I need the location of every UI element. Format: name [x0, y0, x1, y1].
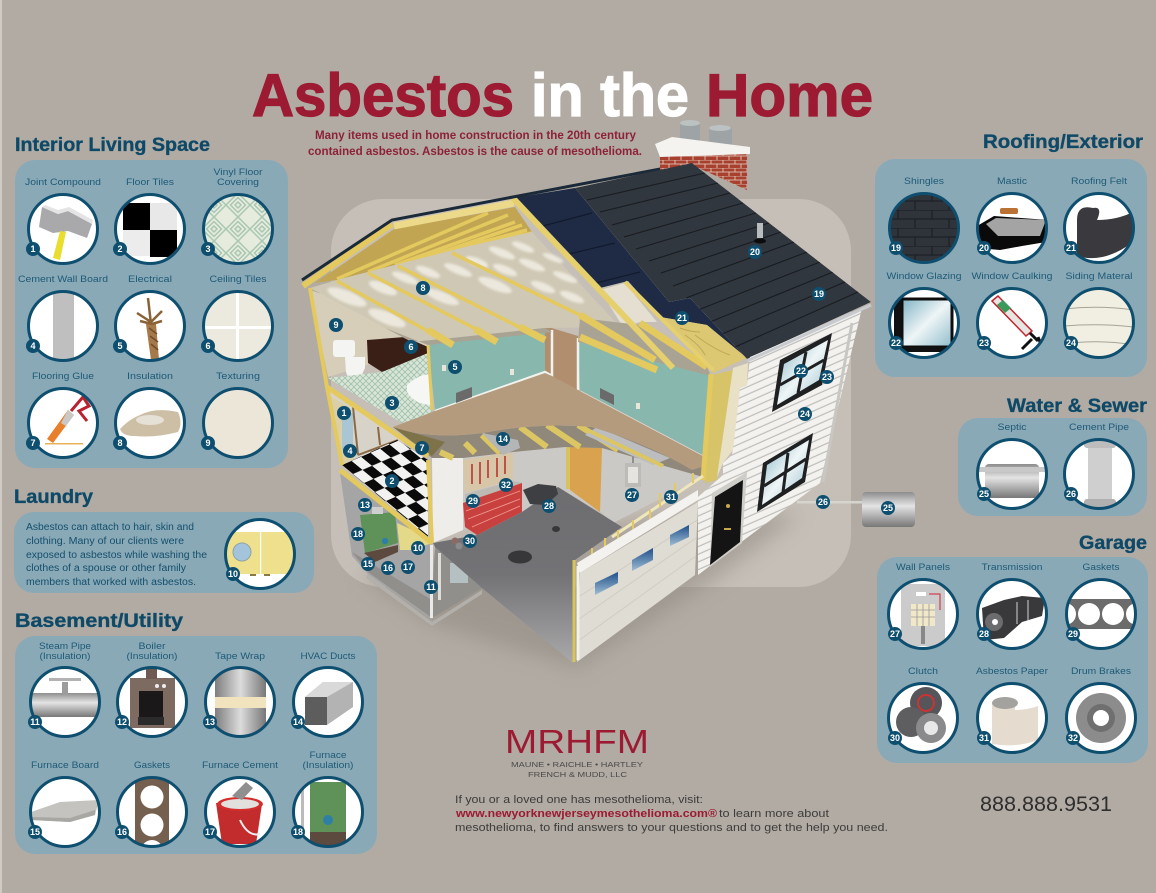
item: Shingles	[889, 176, 959, 263]
house number markers: 10	[413, 543, 423, 553]
house number markers: 13	[360, 500, 370, 510]
text: laundry description: exposed to asbestos while washing the	[26, 550, 208, 561]
text: laundry description	[26, 522, 208, 588]
item: Vinyl Floor Covering	[201, 167, 273, 264]
item: Cement Wall Board: 4	[30, 341, 36, 351]
attic insulation right of rafter	[600, 283, 657, 327]
garage front top trim	[577, 490, 698, 573]
item: Transmission: Transmission	[982, 562, 1042, 573]
item: Ceiling Tiles	[201, 274, 273, 361]
garage back door	[570, 447, 602, 512]
item: Texturing	[201, 371, 273, 458]
tool chest	[463, 483, 522, 535]
electrical panel	[625, 452, 641, 487]
title: in the	[531, 62, 689, 129]
item: Mastic	[977, 176, 1048, 263]
heading: Water & Sewer: Water & Sewer	[1007, 395, 1147, 417]
item: Clutch	[888, 666, 958, 753]
item: Ceiling Tiles: 6	[205, 341, 211, 351]
wall trim	[435, 330, 703, 457]
item: Mastic: 20	[979, 243, 989, 253]
roof vent	[754, 223, 766, 244]
lower window	[757, 433, 813, 512]
house number markers: 25	[883, 503, 893, 513]
item: Joint Compound: Joint Compound	[25, 177, 101, 188]
subtitle	[308, 130, 642, 158]
item: Roofing Felt	[1064, 176, 1134, 263]
chimney	[655, 120, 750, 190]
rafter stripes	[337, 213, 532, 279]
item: Boiler: 12	[117, 717, 127, 727]
item: Floor Tiles	[113, 177, 185, 264]
house number markers: 9	[333, 320, 339, 330]
house number markers: 14	[498, 434, 508, 444]
house number markers: 27	[627, 490, 637, 500]
item: Gaskets (basement): 16	[117, 827, 127, 837]
garage back wall	[463, 447, 703, 530]
front door	[710, 472, 747, 567]
item: Mastic: Mastic	[997, 176, 1027, 187]
item: Gaskets (garage)	[1065, 564, 1137, 650]
item: Transmission: 28	[979, 629, 989, 639]
item: Steam Pipe: (Insulation)	[40, 651, 90, 662]
item: Septic	[977, 422, 1047, 509]
call to action text: If you or a loved one has mesothelioma, visit:	[455, 794, 703, 806]
item: Drum Brakes	[1066, 666, 1136, 753]
heading: Laundry: Laundry	[14, 486, 93, 508]
item: Asbestos Paper	[976, 666, 1049, 753]
left green wall	[428, 327, 545, 410]
item: Window Glazing: 22	[891, 338, 901, 348]
house number markers: 7	[419, 443, 425, 453]
subtitle: Many items used in home construction in the 20th century	[315, 130, 637, 142]
item: Electrical: Electrical	[128, 274, 172, 285]
call to action text: to learn more about	[719, 808, 830, 820]
item: Cement Pipe: 26	[1066, 489, 1076, 499]
item: Flooring Glue: Flooring Glue	[32, 371, 94, 382]
hall back wall	[545, 326, 578, 392]
text: laundry description: clothing. Many of our clients were	[26, 536, 185, 547]
ground shadow	[360, 510, 800, 668]
item: Clutch: Clutch	[908, 666, 938, 677]
logo: MRHFM: MRHFM	[505, 723, 649, 760]
house number markers: 4	[347, 446, 353, 456]
logo: MRHFM: FRENCH & MUDD, LLC	[528, 770, 628, 779]
heading: Roofing/Exterior: Roofing/Exterior	[983, 131, 1143, 153]
roof edge	[302, 163, 692, 280]
item: Window Caulking	[972, 271, 1052, 358]
item: Furnace Cement: 17	[205, 827, 215, 837]
item: Texturing: Texturing	[216, 371, 260, 382]
item: Wall Panels: Wall Panels	[896, 562, 950, 573]
item: Gaskets (basement): Gaskets	[134, 760, 170, 771]
house illustration	[302, 120, 915, 668]
house number markers: 23	[822, 372, 832, 382]
item: Floor Tiles: Floor Tiles	[126, 177, 174, 188]
item: Gaskets (basement)	[115, 762, 188, 848]
item: Shingles: Shingles	[904, 176, 944, 187]
call to action text: mesothelioma, to find answers to your questions and to get the help you need.	[455, 822, 888, 834]
grey soffit above right wall	[578, 318, 711, 376]
attic rafter backing	[315, 207, 532, 283]
item: Furnace Board: Furnace Board	[31, 760, 99, 771]
house number markers: 30	[465, 536, 475, 546]
garage floor	[433, 487, 622, 663]
item: Septic: Septic	[998, 422, 1027, 433]
house number markers: 2	[389, 476, 395, 486]
house number markers: 8	[420, 283, 426, 293]
item: Boiler	[115, 641, 187, 737]
item: Vinyl Floor Covering: Covering	[217, 177, 259, 188]
checker floor	[342, 440, 428, 537]
item: Texturing: 9	[205, 438, 211, 448]
house number markers: 5	[452, 362, 458, 372]
item: Wall Panels	[888, 562, 958, 649]
title: Home	[706, 62, 873, 129]
house number markers: 24	[800, 409, 810, 419]
house number markers: 32	[501, 480, 511, 490]
item: HVAC Ducts: HVAC Ducts	[300, 651, 356, 662]
item: Furnace	[291, 750, 363, 847]
house number markers: 11	[426, 582, 436, 592]
item: Siding Material	[1064, 271, 1134, 358]
item: Cement Wall Board: Cement Wall Board	[18, 274, 108, 285]
item: Vinyl Floor Covering: 3	[205, 244, 211, 254]
item: Boiler: (Insulation)	[126, 651, 178, 662]
item: Joint Compound: 1	[30, 244, 36, 254]
text: laundry description: members that worked with asbestos.	[26, 577, 196, 588]
panel: Roofing/Exterior	[875, 159, 1147, 377]
item: Insulation	[113, 371, 185, 458]
item: Flooring Glue	[26, 371, 98, 458]
item: HVAC Ducts: 14	[293, 717, 303, 727]
garage left wall	[432, 458, 465, 543]
septic tank	[862, 492, 915, 527]
text: laundry description: Asbestos can attach to hair, skin and	[26, 522, 194, 533]
item: Furnace: (Insulation)	[302, 760, 354, 771]
item: Electrical: 5	[117, 341, 123, 351]
ceiling joist band	[393, 425, 705, 477]
duct right	[585, 427, 670, 465]
house number markers: 26	[818, 497, 828, 507]
call to action text	[455, 794, 888, 834]
item: Window Glazing: Window Glazing	[886, 271, 962, 282]
subtitle: contained asbestos. Asbestos is the cause of mesothelioma.	[308, 146, 642, 158]
title: Asbestos	[252, 62, 514, 129]
item: Septic: 25	[979, 489, 989, 499]
upper window	[772, 333, 832, 412]
item: Drum Brakes: 32	[1068, 733, 1078, 743]
item: Tape Wrap: 13	[205, 717, 215, 727]
ceiling joists and rafters	[303, 198, 713, 543]
item: Roofing Felt: Roofing Felt	[1071, 176, 1127, 187]
item: Clutch: 30	[890, 733, 900, 743]
call to action text: www.newyorknewjerseymesothelioma.com®	[455, 808, 718, 820]
furnace	[360, 507, 398, 562]
heading: Interior Living Space: Interior Living Space	[15, 134, 210, 156]
oil stains	[508, 526, 560, 564]
duct 14	[482, 433, 520, 455]
panel: Basement/Utility	[15, 636, 377, 862]
item: Shingles: 19	[891, 243, 901, 253]
title	[252, 62, 873, 129]
item: Siding Material: 24	[1066, 338, 1076, 348]
item: Asbestos Paper: Asbestos Paper	[976, 666, 1049, 677]
water heater	[450, 563, 468, 583]
first floor wall	[327, 387, 425, 465]
sewer pipe	[797, 501, 863, 504]
house backdrop panel	[331, 199, 851, 587]
item: HVAC Ducts	[291, 651, 363, 737]
heading: Garage: Garage	[1079, 532, 1147, 554]
item: Window Glazing	[886, 271, 962, 358]
phone number: 888.888.9531	[980, 793, 1112, 816]
item: Cement Pipe	[1064, 422, 1134, 509]
bathroom back wall	[310, 290, 432, 377]
item: Electrical	[113, 274, 185, 361]
house number markers: 18	[353, 529, 363, 539]
item: Tape Wrap: Tape Wrap	[215, 651, 265, 662]
item: Window Caulking: Window Caulking	[972, 271, 1052, 282]
olive beam near 7	[393, 427, 445, 456]
item: Gaskets (garage): 29	[1068, 629, 1078, 639]
item: Asbestos Paper: 31	[979, 733, 989, 743]
item: Joint Compound	[25, 177, 101, 264]
item: Gaskets (garage): Gaskets	[1082, 562, 1120, 573]
house number markers: 22	[796, 366, 806, 376]
vanity	[367, 337, 428, 372]
insulation tufts	[325, 239, 586, 331]
tub	[407, 374, 432, 405]
laundry machines	[397, 523, 432, 550]
garage door	[574, 502, 698, 662]
item: Cement Pipe: Cement Pipe	[1069, 422, 1129, 433]
house number markers: 6	[408, 342, 414, 352]
item: Ceiling Tiles: Ceiling Tiles	[210, 274, 267, 285]
house number markers: 21	[677, 313, 687, 323]
attic insulation floor	[310, 232, 620, 342]
house number markers: 1	[341, 408, 347, 418]
house number markers: 28	[544, 501, 554, 511]
item: Laundry machines: 10	[228, 569, 238, 579]
house number markers: 15	[363, 559, 373, 569]
house number markers: 3	[389, 398, 395, 408]
item: Insulation: 8	[117, 438, 123, 448]
wall insulation	[703, 363, 748, 483]
bathroom floor	[328, 353, 432, 423]
house number markers: 19	[814, 289, 824, 299]
item: Transmission	[977, 562, 1047, 649]
item: Wall Panels: 27	[890, 629, 900, 639]
house number markers: 20	[750, 247, 760, 257]
transmission on floor	[523, 484, 558, 505]
item: Flooring Glue: 7	[30, 438, 36, 448]
item: Vinyl Floor Covering: Vinyl Floor	[213, 167, 263, 178]
item: Cement Wall Board	[18, 274, 108, 361]
item: Furnace: 18	[293, 827, 303, 837]
heading: Basement/Utility: Basement/Utility	[15, 610, 183, 632]
item: Furnace: Furnace	[310, 750, 346, 761]
item: Drum Brakes: Drum Brakes	[1071, 666, 1131, 677]
navy underlayment	[513, 188, 747, 359]
item: Furnace Board: 15	[30, 827, 40, 837]
pegboard	[463, 452, 522, 503]
house number markers	[329, 245, 895, 594]
toilet	[333, 340, 365, 383]
item: Furnace Cement: Furnace Cement	[202, 760, 278, 771]
item: Boiler: Boiler	[138, 641, 166, 652]
item: Steam Pipe	[28, 641, 100, 737]
house number markers: 17	[403, 562, 413, 572]
item: Furnace Cement	[202, 760, 278, 847]
item: Floor Tiles: 2	[117, 244, 123, 254]
logo: MRHFM: MAUNE • RAICHLE • HARTLEY	[511, 760, 643, 769]
item: Siding Material: Siding Materal	[1066, 271, 1132, 282]
house number markers: 29	[468, 496, 478, 506]
item: Laundry machines	[225, 519, 296, 589]
item: Steam Pipe: 11	[30, 717, 40, 727]
plywood sheathing	[660, 317, 747, 373]
carpet floor	[393, 373, 705, 470]
ceiling joists	[440, 425, 618, 458]
item: Insulation: Insulation	[127, 371, 173, 382]
pipes	[430, 545, 441, 618]
panel: Laundry	[14, 512, 314, 593]
right green wall	[578, 342, 710, 455]
item: Furnace Board	[28, 760, 100, 847]
ceiling tile strip	[385, 328, 552, 345]
siding wall	[698, 308, 862, 575]
house number markers: 16	[383, 563, 393, 573]
item: Window Caulking: 23	[979, 338, 989, 348]
item: Steam Pipe: Steam Pipe	[39, 641, 91, 652]
house number markers: 31	[666, 492, 676, 502]
panel: Water & Sewer	[958, 418, 1147, 516]
item: Tape Wrap	[203, 651, 275, 737]
vents and outlets	[442, 365, 640, 409]
item: Roofing Felt: 21	[1066, 243, 1076, 253]
logo: MRHFM	[505, 723, 649, 779]
basement	[340, 473, 482, 626]
garage framing top	[592, 473, 703, 557]
panel: Garage	[877, 557, 1148, 763]
panel: Interior Living Space	[15, 160, 288, 468]
clutch parts on floor	[452, 538, 462, 550]
text: laundry description: clothes of a spouse or other family	[26, 563, 186, 574]
shingled roof	[575, 163, 871, 359]
